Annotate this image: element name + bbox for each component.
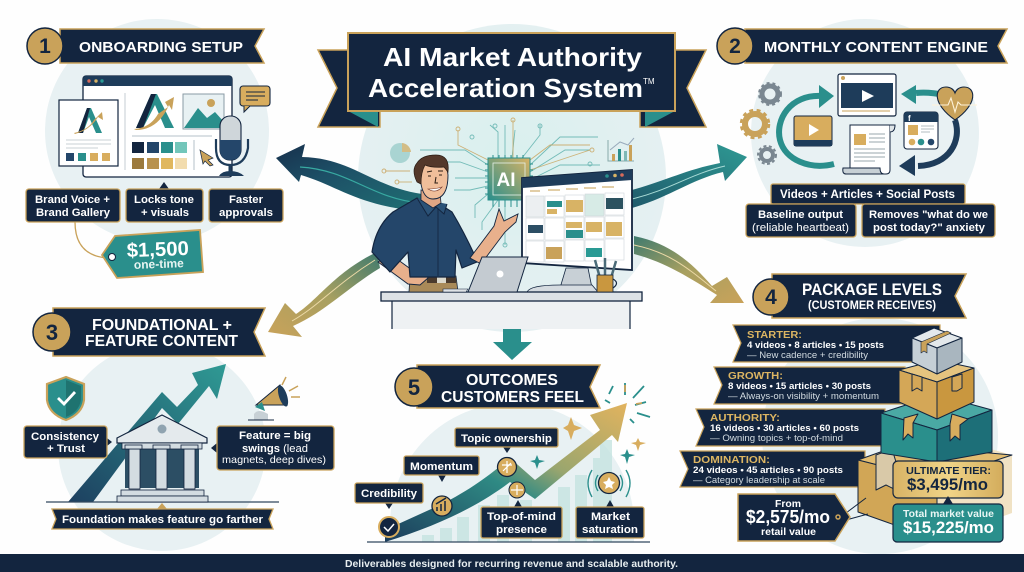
callout: baseline output (746, 204, 856, 237)
heading ribbon: 4 (765, 286, 777, 309)
icon: megaphone (248, 377, 300, 420)
brand doc (59, 100, 118, 166)
forearm raised (470, 209, 518, 264)
callout: brand voice: Brand Voice + (35, 194, 110, 206)
article scroll (843, 125, 895, 174)
icon: shield (47, 377, 84, 420)
desk (381, 292, 642, 329)
callout: momentum (404, 456, 479, 482)
callout: removes anxiety: Removes "what do we (869, 209, 988, 221)
big gold box (858, 434, 1012, 540)
callout: momentum: Momentum (410, 461, 473, 473)
arrow: to foundational content (268, 252, 380, 337)
heading ribbon (717, 28, 1007, 64)
arrow: to monthly content engine (632, 144, 747, 208)
colour swatches (132, 142, 187, 169)
ground line (367, 541, 650, 543)
cycle arrow: navy (899, 120, 957, 176)
icon: heart (932, 87, 977, 120)
logo (134, 94, 174, 130)
ultimate tier callout (893, 461, 1003, 498)
node: credibility (379, 517, 399, 537)
heading ribbon: MONTHLY CONTENT ENGINE (764, 39, 988, 56)
heading ribbon (753, 274, 966, 318)
price tag: $1,500 (126, 238, 189, 262)
price tag: one-time (134, 256, 184, 272)
mug with pens (595, 258, 616, 292)
level: domination: DOMINATION: (693, 454, 770, 466)
level: starter: 4 videos • 8 articles • 15 posts (747, 340, 884, 351)
shirt (372, 198, 477, 277)
social card (904, 112, 938, 149)
callout: removes anxiety (862, 204, 995, 237)
callout: topic ownership: Topic ownership (461, 433, 552, 445)
panel 1: onboarding setup (26, 19, 283, 278)
background circle (762, 318, 998, 554)
panel 3: foundational and feature content (24, 308, 334, 551)
callout: baseline output: (reliable heartbeat) (752, 222, 849, 234)
total value callout: Total market value (903, 508, 994, 520)
heading ribbon: (CUSTOMER RECEIVES) (808, 300, 936, 312)
callout: feature big swings: swings (lead (242, 443, 308, 455)
image placeholder (183, 94, 224, 129)
heading ribbon: FEATURE CONTENT (85, 333, 238, 350)
browser window (83, 76, 232, 177)
heading ribbon: OUTCOMES (466, 372, 558, 389)
icon: pie chart (390, 143, 411, 163)
node: momentum (432, 496, 452, 516)
callout: top-of-mind presence: presence (496, 524, 547, 536)
icon: microphone (216, 116, 248, 176)
callout: market saturation (576, 500, 644, 538)
level: growth: — Always-on visibility + momentum (728, 391, 879, 402)
title banner: TM (643, 77, 655, 86)
gold box (899, 360, 974, 419)
icon: building (117, 415, 208, 502)
burst lines (605, 383, 650, 423)
level: domination: 24 videos • 45 articles • 90 posts (693, 465, 843, 476)
heading ribbon: 2 (729, 35, 741, 58)
arrow: to onboarding setup (276, 144, 422, 211)
heading ribbon: 1 (39, 35, 51, 58)
icon: AI chip: AI (496, 170, 516, 191)
sparkles (530, 417, 646, 469)
title banner (318, 33, 706, 127)
level: starter (733, 325, 940, 362)
node: market saturation (588, 470, 630, 497)
laptop (443, 257, 528, 292)
background semicircle (390, 403, 634, 542)
background circle (58, 343, 266, 551)
cursor (200, 150, 213, 166)
ribbon folds (348, 111, 675, 127)
heading ribbon (395, 365, 600, 408)
callout: locks tone: + visuals (141, 207, 189, 219)
teal box (881, 395, 992, 462)
background circle (358, 24, 666, 332)
cycle arrow: heart to player (901, 85, 945, 104)
title text: AI Market Authority (383, 42, 643, 72)
icon: gears (741, 83, 781, 164)
eyes and brows (427, 171, 443, 183)
ribbon wings (318, 50, 380, 127)
background bars (422, 440, 612, 542)
callout: brand voice (26, 189, 120, 222)
growth arrow (68, 364, 226, 502)
level: authority: AUTHORITY: (710, 412, 780, 424)
callout: locks tone (126, 182, 203, 222)
cycle arrow: teal (779, 85, 834, 166)
ultimate tier callout: $3,495/mo (907, 475, 988, 494)
gray box (912, 328, 962, 374)
level: starter: — New cadence + credibility (747, 350, 868, 361)
total value callout: $15,225/mo (903, 519, 994, 537)
box stack (858, 328, 1012, 540)
forearm hip (378, 254, 428, 285)
level: growth: 8 videos • 15 articles • 30 posts (728, 381, 871, 392)
callout: videos articles social (771, 184, 965, 204)
panel 5: outcomes customers feel (355, 365, 650, 542)
arrow: to package levels (634, 236, 744, 303)
background circle (751, 19, 979, 247)
total value callout (893, 496, 1003, 542)
retail price callout: From (775, 498, 801, 510)
callout: removes anxiety: post today?" anxiety (873, 222, 986, 234)
level: authority: 16 videos • 30 articles • 60 posts (710, 423, 859, 434)
background circle (45, 19, 269, 243)
level: growth: GROWTH: (728, 370, 783, 382)
ultimate tier callout: ULTIMATE TIER: (906, 465, 991, 477)
small video (794, 116, 832, 146)
neck (421, 190, 441, 208)
face (420, 161, 448, 199)
heading ribbon: CUSTOMERS FEEL (441, 389, 584, 406)
title banner: Acceleration System (368, 73, 643, 103)
level: domination (680, 451, 865, 487)
callout: topic ownership (455, 428, 558, 453)
retail price callout (738, 494, 868, 541)
arrow: down to outcomes (493, 329, 532, 360)
video player (838, 74, 896, 116)
callout: locks tone: Locks tone (134, 194, 194, 206)
level: authority: — Owning topics + top-of-mind (710, 433, 843, 444)
callout: top-of-mind presence (481, 500, 562, 538)
person (372, 155, 518, 292)
callout: consistency and trust (24, 426, 112, 458)
heading ribbon: ONBOARDING SETUP (79, 39, 243, 56)
callout: brand voice: Brand Gallery (36, 207, 111, 219)
callout: faster approvals (209, 189, 283, 222)
pants (409, 276, 458, 292)
footer bar (0, 554, 1024, 572)
heading ribbon: PACKAGE LEVELS (802, 280, 942, 299)
level: authority (696, 409, 885, 446)
icon: speech bubble (240, 86, 270, 112)
rising arrow (385, 403, 627, 542)
level: growth (714, 367, 905, 404)
hair (414, 155, 448, 184)
caption ribbon (52, 503, 273, 529)
heading ribbon: 3 (46, 320, 58, 345)
heading ribbon (27, 28, 264, 64)
social card: f (908, 114, 911, 123)
callout: feature big swings (211, 426, 334, 470)
footer bar: Deliverables designed for recurring revenue and scalable authority. (345, 558, 678, 570)
icon: AI chip (485, 155, 533, 207)
retail price callout: retail value (761, 526, 816, 538)
callout: baseline output: Baseline output (758, 209, 843, 221)
node: top-of-mind (509, 482, 525, 498)
heading ribbon: FOUNDATIONAL + (92, 317, 232, 334)
callout: consistency and trust: Consistency (31, 431, 100, 443)
icon: small bar chart (608, 138, 634, 161)
panel 2: monthly content engine (717, 19, 1007, 247)
illustration: presenter at desk (372, 155, 642, 329)
panel 4: package levels (680, 274, 1012, 554)
ground line (46, 501, 279, 503)
circuit lines (420, 124, 600, 247)
caption ribbon: Foundation makes feature go farther (62, 514, 264, 526)
heading ribbon (33, 308, 265, 356)
callout: market saturation: saturation (582, 524, 638, 536)
callout: top-of-mind presence: Top-of-mind (487, 511, 556, 523)
callout: faster approvals: Faster (229, 194, 264, 206)
retail price callout: $2,575/mo (746, 507, 830, 527)
callout: market saturation: Market (591, 511, 630, 523)
callout: credibility (355, 483, 423, 509)
callout: feature big swings: magnets, deep dives) (222, 454, 326, 466)
callout: consistency and trust: + Trust (47, 443, 85, 455)
level: domination: — Category leadership at scale (693, 475, 825, 486)
heading ribbon: 5 (408, 375, 420, 400)
price tag (75, 222, 203, 278)
monitor (522, 170, 632, 292)
callout: feature big swings: Feature = big (239, 430, 311, 442)
mouth (428, 187, 442, 191)
level: starter: STARTER: (747, 329, 802, 341)
panel: center hero (358, 24, 666, 332)
node: topic ownership (498, 458, 516, 476)
callout: faster approvals: approvals (219, 207, 273, 219)
callout: videos articles social: Videos + Articles + Social Posts (780, 189, 955, 201)
callout: credibility: Credibility (361, 488, 418, 500)
